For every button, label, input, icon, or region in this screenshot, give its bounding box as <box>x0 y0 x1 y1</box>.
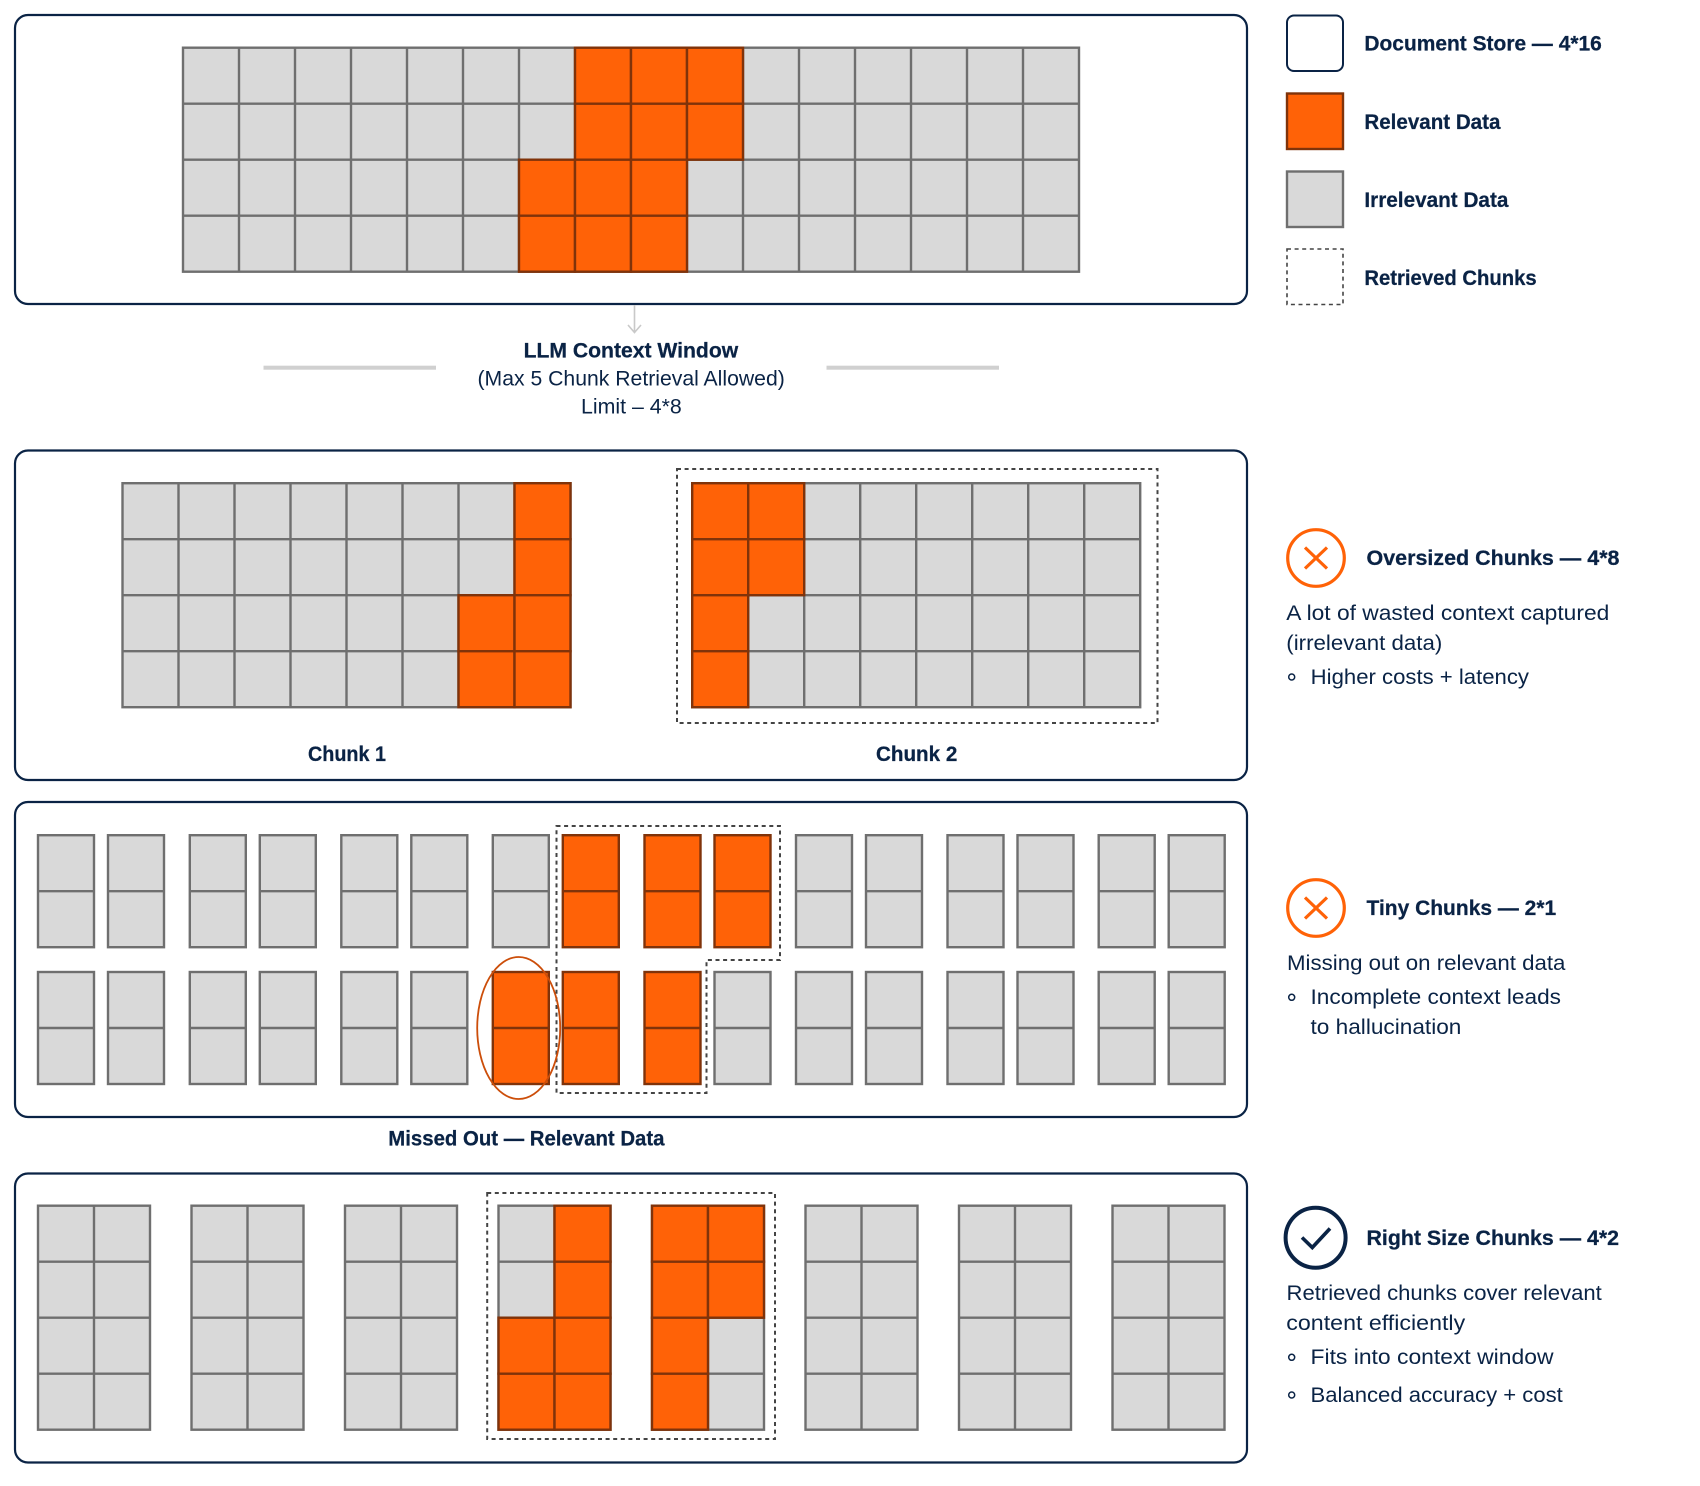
retrieved chunk outline <box>677 469 1158 723</box>
legend item: retrieved chunks <box>1287 249 1537 304</box>
text: oversized explanation: Higher costs + latency <box>1311 666 1530 689</box>
description: right size chunks <box>1286 1208 1619 1407</box>
retrieved chunks outline <box>487 1193 775 1439</box>
heading: LLM context window: (Max 5 Chunk Retrieval Allowed) <box>478 368 785 390</box>
label: chunk 2: Chunk 2 <box>876 743 957 766</box>
text: right size explanation: content efficiently <box>1286 1312 1466 1335</box>
chart: chunk 1 grid <box>122 483 570 707</box>
panel: right size chunks <box>15 1174 1247 1462</box>
legend item: irrelevant data: Irrelevant Data <box>1364 189 1509 212</box>
heading: LLM context window: Limit – 4*8 <box>581 396 682 418</box>
description: oversized chunks <box>1286 530 1620 689</box>
chart: tiny chunks top row <box>38 835 1225 947</box>
heading: tiny chunks: Tiny Chunks — 2*1 <box>1366 897 1557 920</box>
panel: document store <box>15 15 1247 304</box>
text: right size explanation: Fits into context window <box>1310 1346 1554 1369</box>
chart: document store grid 4*16 <box>183 48 1079 272</box>
text: tiny explanation: Incomplete context leads <box>1310 986 1561 1009</box>
legend item: retrieved chunks: Retrieved Chunks <box>1364 267 1537 290</box>
chart: chunk 2 grid <box>692 483 1140 707</box>
heading: LLM context window: LLM Context Window <box>524 340 739 362</box>
text: oversized explanation: A lot of wasted context captured <box>1286 602 1609 625</box>
icon: navy check <box>1286 1208 1346 1268</box>
text: right size explanation: Balanced accuracy + cost <box>1310 1384 1563 1407</box>
legend item: relevant data: Relevant Data <box>1364 111 1501 134</box>
description: tiny chunks <box>1287 880 1566 1039</box>
legend item: relevant data <box>1287 94 1501 149</box>
text: tiny explanation: Missing out on relevant data <box>1287 952 1566 975</box>
text: right size explanation <box>1286 1282 1602 1407</box>
icon: orange x <box>1288 530 1344 586</box>
panel: oversized chunks <box>15 450 1247 780</box>
arrow: to context window <box>628 305 641 332</box>
icon: orange x <box>1288 880 1344 936</box>
retrieved chunks outline <box>556 826 780 1093</box>
legend item: document store: Document Store — 4*16 <box>1364 33 1602 56</box>
text: oversized explanation <box>1286 602 1609 689</box>
text: oversized explanation: (irrelevant data) <box>1286 632 1442 655</box>
heading: oversized chunks: Oversized Chunks — 4*8 <box>1366 547 1620 570</box>
panel: tiny chunks <box>15 802 1247 1117</box>
label: missed out: Missed Out — Relevant Data <box>388 1128 665 1150</box>
callout: missed out ellipse <box>477 957 560 1099</box>
text: tiny explanation <box>1287 952 1566 1039</box>
legend item: irrelevant data <box>1287 172 1509 227</box>
text: right size explanation: Retrieved chunks cover relevant <box>1286 1282 1602 1305</box>
heading: LLM context window <box>264 340 999 418</box>
legend item: document store <box>1287 16 1602 71</box>
heading: right size chunks: Right Size Chunks — 4*2 <box>1366 1227 1619 1250</box>
legend <box>1287 16 1602 304</box>
label: chunk 1: Chunk 1 <box>308 743 386 766</box>
text: tiny explanation: to hallucination <box>1310 1016 1461 1039</box>
chart: tiny chunks bottom row <box>38 972 1225 1084</box>
chart: right size chunk blocks <box>38 1206 1224 1430</box>
